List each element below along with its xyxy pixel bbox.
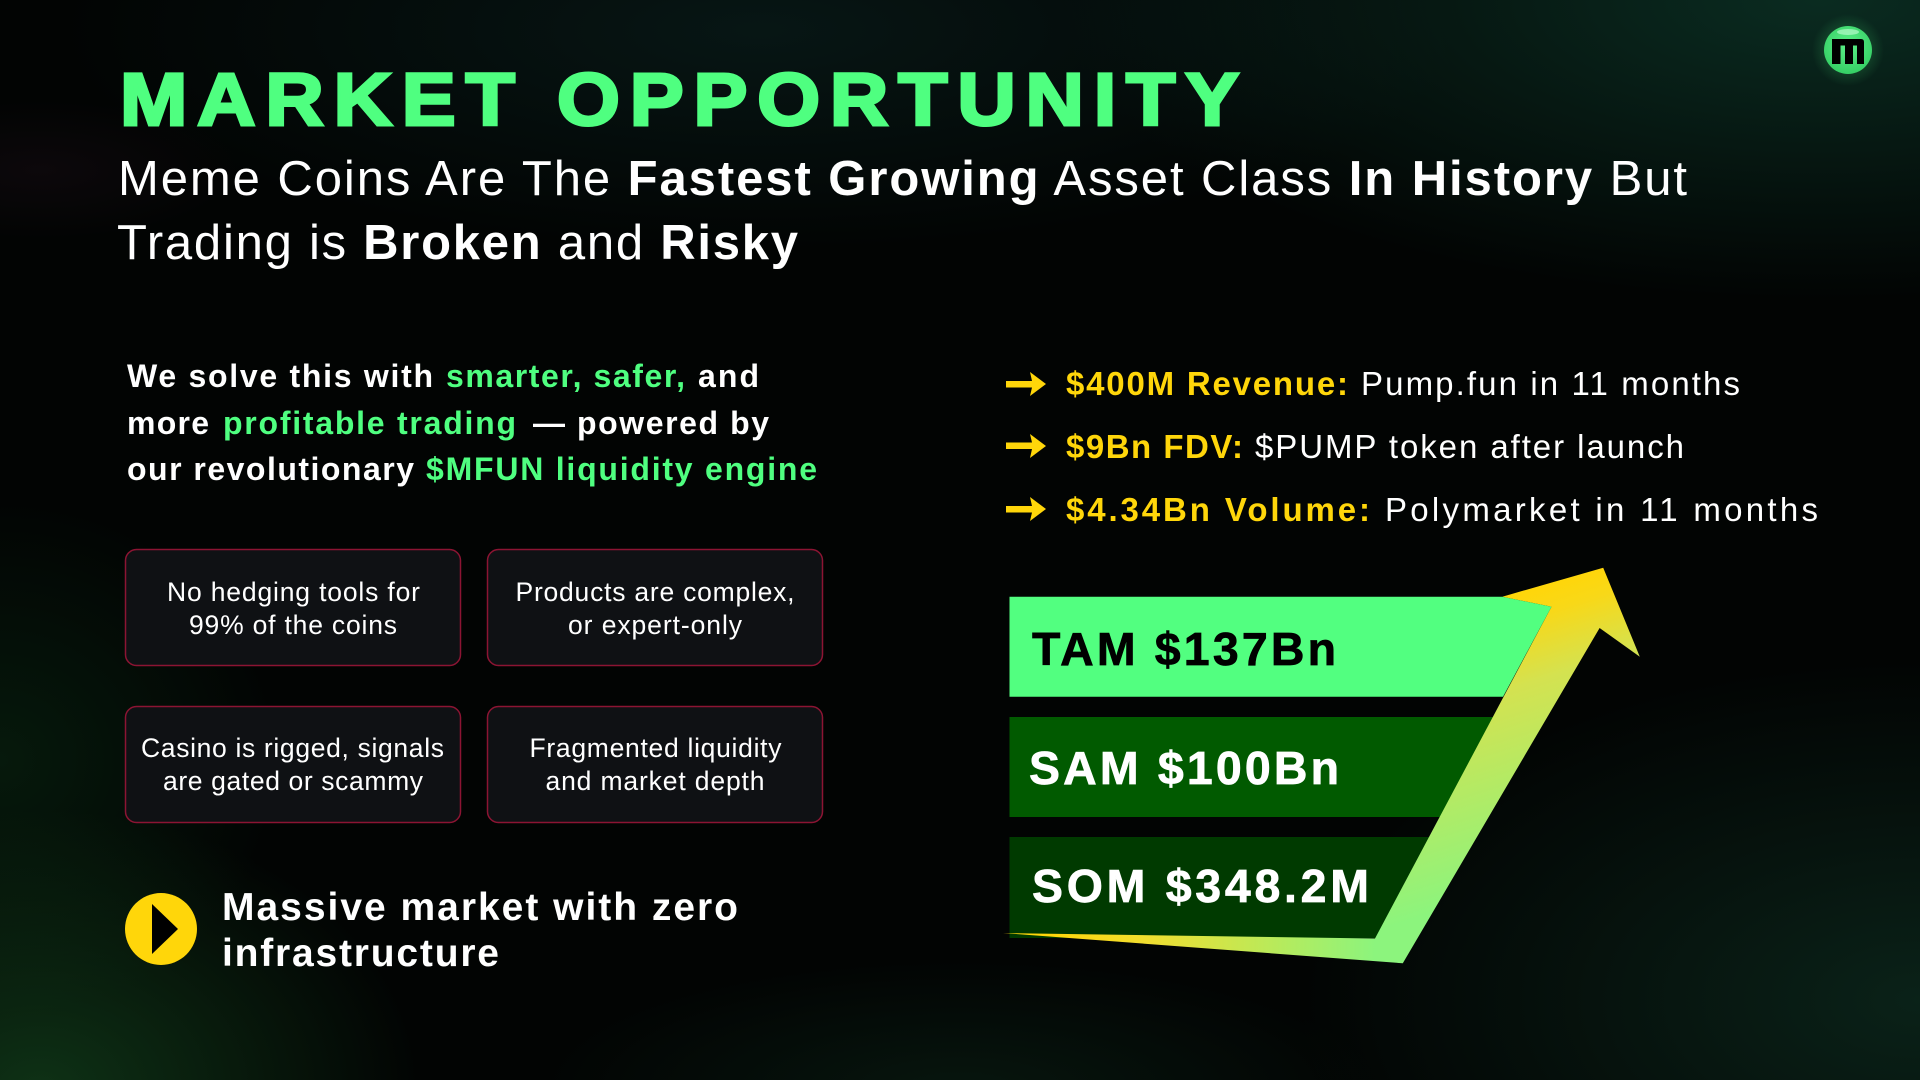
- callout: massive market: [222, 886, 738, 975]
- stat: fdv: $9Bn FDV:: [1066, 428, 1243, 465]
- icon: play circle: [125, 893, 197, 965]
- problem card: liquidity: [488, 706, 822, 822]
- problem card: complexity: [488, 550, 822, 666]
- subtitle: [117, 152, 1687, 270]
- solution paragraph: smarter, safer,: [446, 358, 685, 394]
- problem card: hedging: [126, 550, 460, 666]
- solution paragraph: and: [698, 358, 759, 394]
- stat: fdv: $PUMP token after launch: [1255, 428, 1684, 465]
- stat: revenue: [1006, 365, 1740, 402]
- problem card: casino: Casino is rigged, signals: [141, 733, 444, 763]
- solution paragraph: We solve this with: [127, 358, 433, 394]
- solution paragraph: our revolutionary: [127, 451, 414, 487]
- solution paragraph: — powered by: [533, 405, 769, 441]
- solution paragraph: more: [127, 405, 209, 441]
- TAM bar: TAM $137Bn: [1032, 623, 1336, 675]
- problem card: liquidity: and market depth: [546, 766, 764, 796]
- SOM bar: SOM $348.2M: [1032, 860, 1369, 912]
- stat: volume: $4.34Bn Volume:: [1066, 491, 1370, 528]
- SOM bar: [1010, 837, 1433, 938]
- problem card: complexity: Products are complex,: [516, 577, 794, 607]
- SAM bar: SAM $100Bn: [1029, 742, 1339, 794]
- title: MARKET OPPORTUNITY: [120, 58, 1249, 141]
- problem card: casino: [126, 706, 460, 822]
- problem card: casino: are gated or scammy: [163, 766, 424, 796]
- problem card: liquidity: Fragmented liquidity: [530, 733, 782, 763]
- solution paragraph: profitable trading: [223, 405, 516, 441]
- problem card: hedging: No hedging tools for: [167, 577, 420, 607]
- callout: massive market: Massive market with zero: [222, 886, 738, 929]
- stat: volume: [1006, 491, 1818, 528]
- problem card: hedging: 99% of the coins: [189, 610, 397, 640]
- stat: volume: Polymarket in 11 months: [1385, 491, 1818, 528]
- problem card: complexity: or expert-only: [568, 610, 743, 640]
- logo: [1812, 14, 1884, 86]
- SAM bar: [1010, 717, 1496, 817]
- subtitle: Trading is Broken and Risky: [117, 216, 798, 270]
- TAM bar: [1010, 597, 1552, 697]
- callout: massive market: infrastructure: [222, 932, 499, 975]
- subtitle: Meme Coins Are The Fastest Growing Asset Class In History But: [118, 152, 1687, 206]
- stat: revenue: $400M Revenue:: [1066, 365, 1348, 402]
- solution paragraph: $MFUN liquidity engine: [426, 451, 817, 487]
- growth arrow: [1003, 568, 1640, 963]
- stat: revenue: Pump.fun in 11 months: [1361, 365, 1740, 402]
- solution paragraph: [127, 358, 817, 487]
- stat: fdv: [1006, 428, 1684, 465]
